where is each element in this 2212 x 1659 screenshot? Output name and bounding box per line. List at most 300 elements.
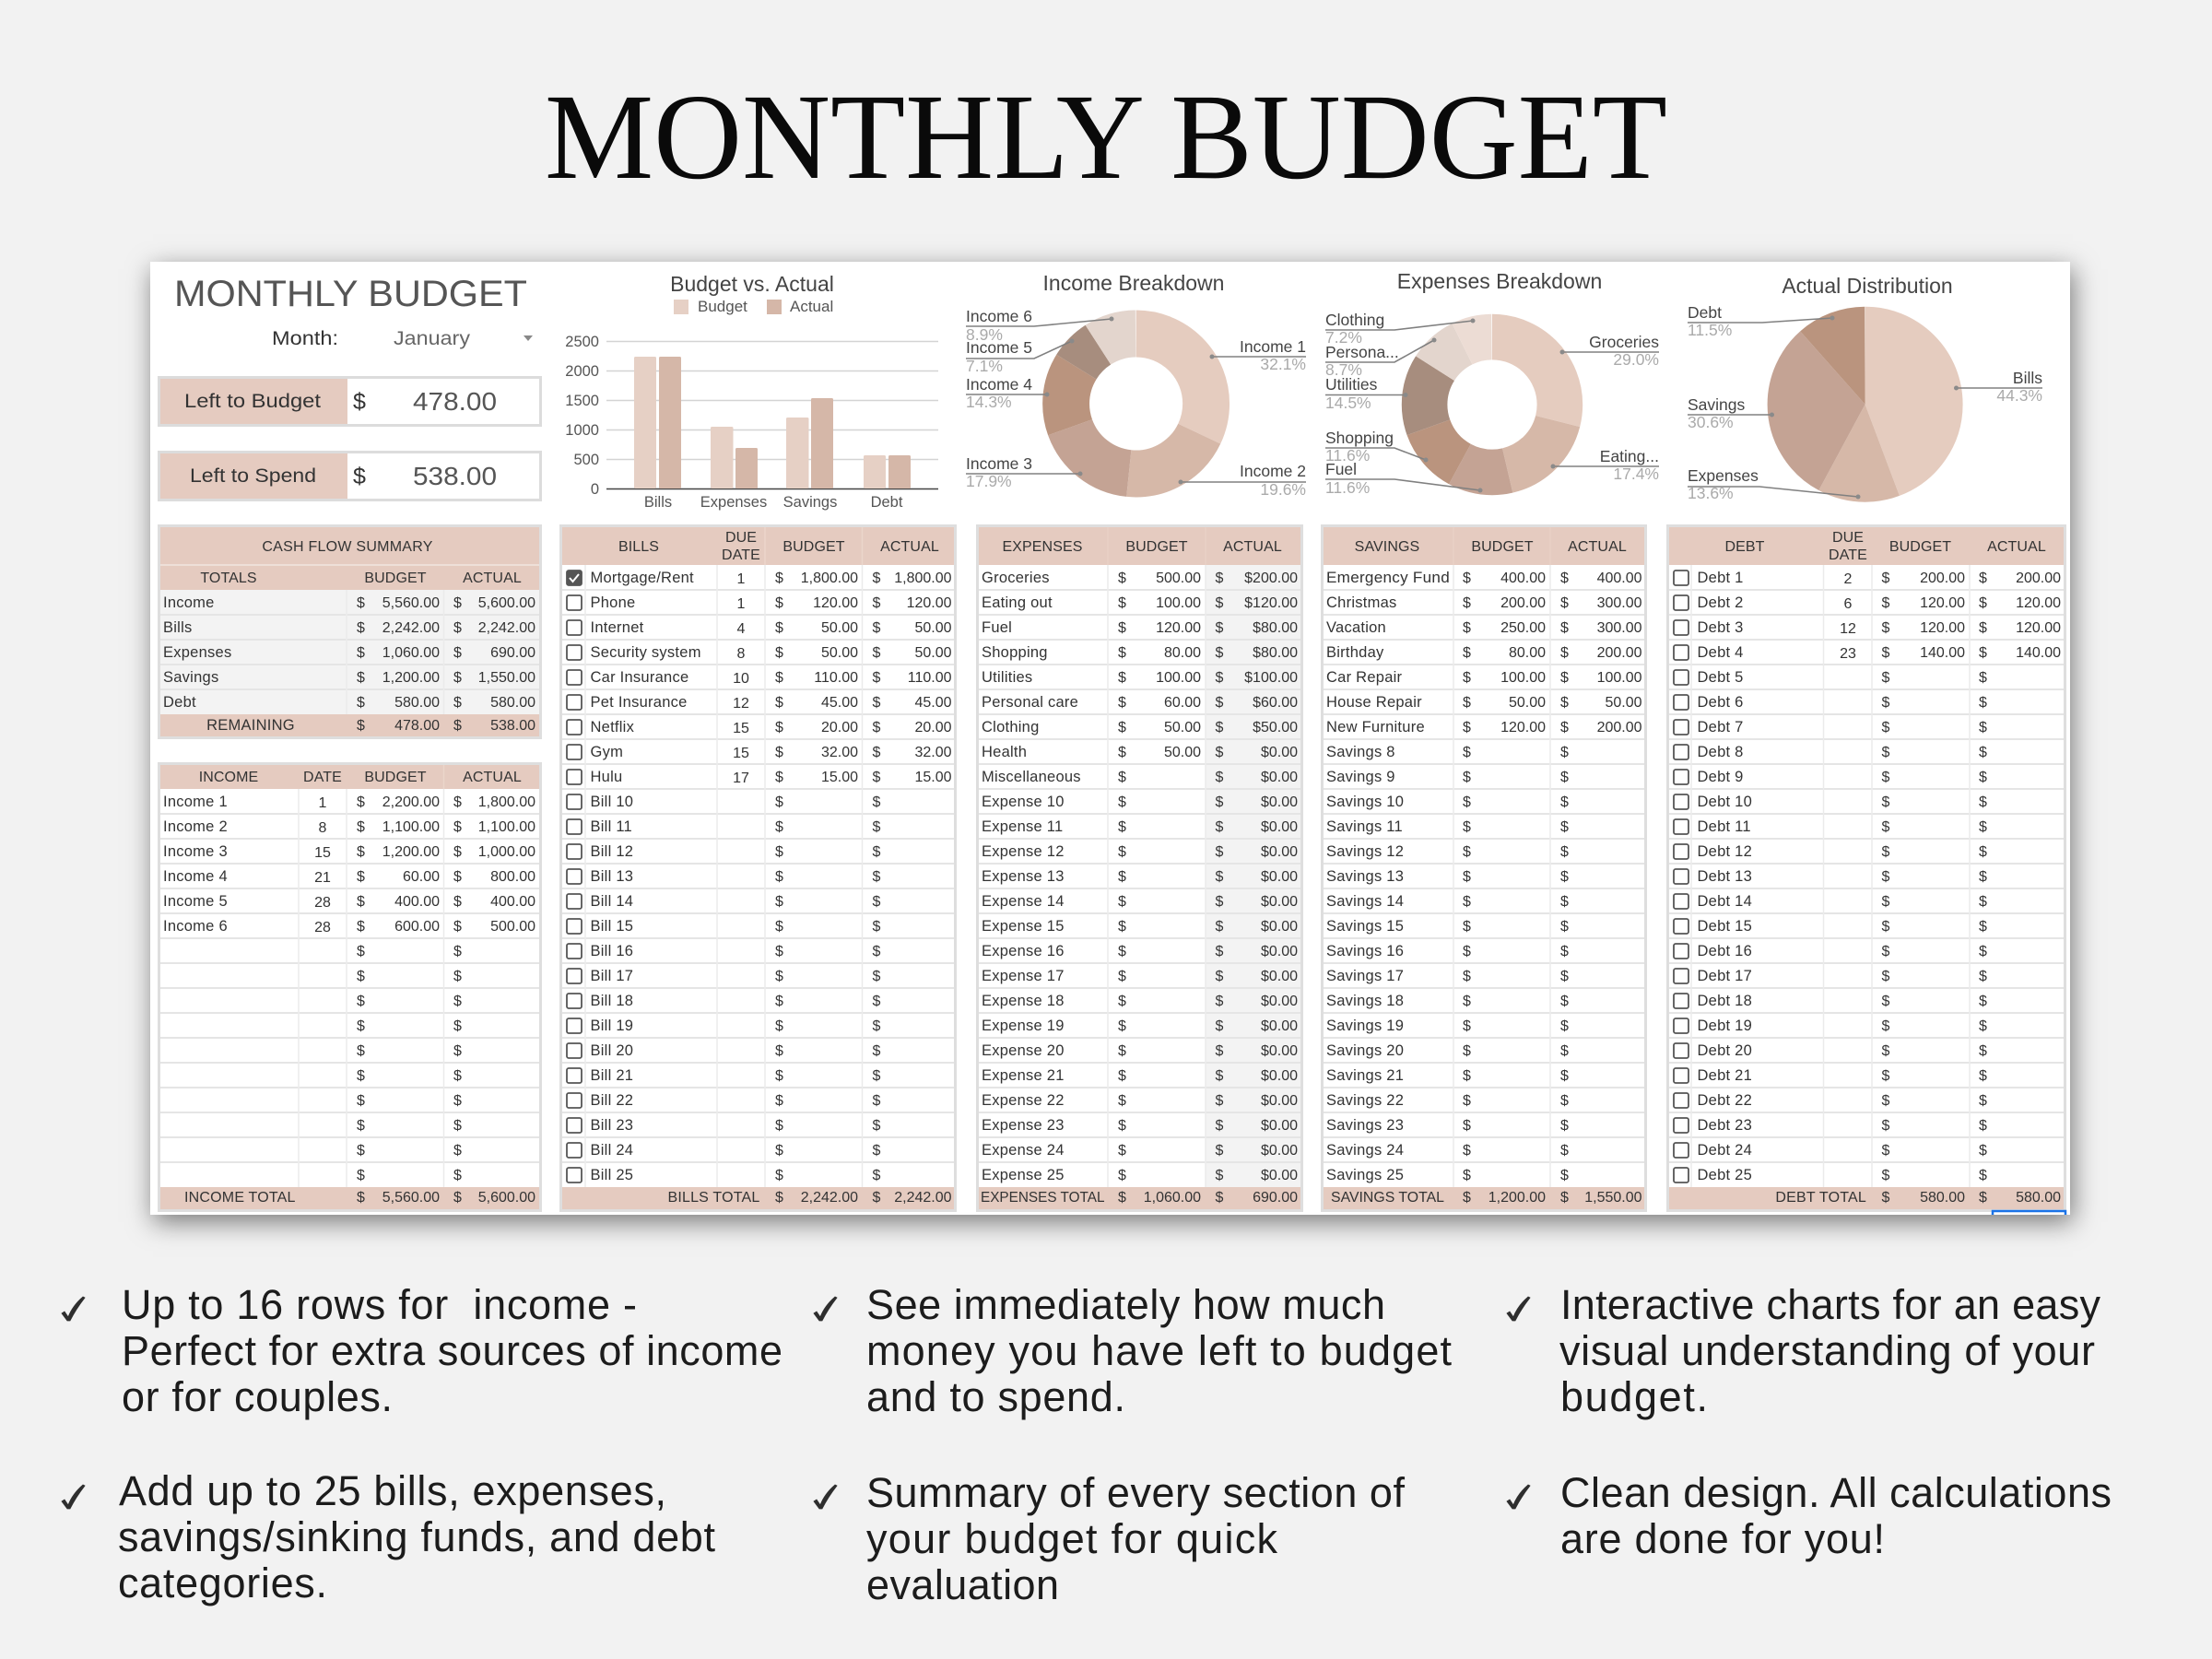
left to spend box (159, 452, 540, 500)
dollar signs: $ (1979, 1143, 1987, 1159)
budget values (382, 595, 440, 734)
dollar signs: $ (872, 869, 881, 885)
feature: income rows: Up to 16 rows for income - (122, 1281, 637, 1328)
savings names: Christmas (1326, 594, 1397, 611)
actual values: 1,800.00 (894, 571, 952, 586)
dollar signs: $ (1560, 919, 1569, 935)
savings names: Savings 9 (1326, 769, 1395, 785)
dollar signs: $ (1882, 894, 1889, 910)
budget values (382, 794, 440, 935)
dollar signs: $ (1215, 844, 1224, 860)
slice labels: 7.2% (1325, 328, 1362, 347)
budget values: 80.00 (1509, 645, 1546, 661)
header: BUDGET (1471, 539, 1534, 555)
dollar signs: $ (1979, 620, 1987, 636)
debt names: Debt 19 (1698, 1018, 1752, 1034)
bill names: Internet (590, 619, 644, 636)
dollar signs: $ (1882, 720, 1889, 735)
dollar signs: $ (775, 1118, 783, 1134)
dollar signs: $ (1118, 969, 1126, 984)
bills total row: 2,242.00 (894, 1190, 952, 1206)
dollar signs: $ (357, 1118, 365, 1134)
header: ACTUAL (880, 539, 939, 555)
dates: 28 (314, 895, 331, 911)
debt names: Debt 13 (1698, 868, 1752, 885)
due dates: 1 (737, 596, 746, 612)
dollar signs: $ (453, 819, 462, 835)
dollar signs: $ (775, 670, 783, 686)
header: DUE (1832, 530, 1864, 546)
dollar signs: $ (357, 620, 365, 636)
actual values: 5,600.00 (478, 595, 535, 611)
income total row: $ (357, 1190, 365, 1206)
slice labels: 13.6% (1688, 484, 1734, 502)
actual values: $0.00 (1261, 1143, 1298, 1159)
actual values: 1,000.00 (478, 844, 535, 860)
header: CASH FLOW SUMMARY (262, 539, 433, 555)
bill names: Phone (590, 594, 635, 611)
dollar signs: $ (1118, 894, 1126, 910)
bill names: Bill 17 (590, 968, 633, 984)
dollar signs: $ (872, 994, 881, 1009)
budget values (1500, 571, 1546, 735)
actual values: $0.00 (1261, 894, 1298, 910)
actual values: 300.00 (1597, 595, 1642, 611)
slice labels (966, 307, 1306, 499)
donut slices (1425, 337, 1559, 472)
dollar signs: $ (1118, 1118, 1126, 1134)
dollar signs: $ (1118, 1043, 1126, 1059)
slice labels (1688, 303, 2042, 502)
row names (163, 594, 295, 734)
dollar signs: $ (1463, 571, 1471, 586)
debt names: Debt 24 (1698, 1142, 1752, 1159)
slice labels: 30.6% (1688, 413, 1734, 431)
slice labels: 17.4% (1613, 465, 1659, 483)
budget values: 100.00 (1156, 670, 1201, 686)
income names (163, 794, 228, 935)
dollar signs (1882, 571, 1987, 1183)
dollar signs: $ (1979, 571, 1987, 586)
expense names: Expense 13 (982, 868, 1065, 885)
actual values (478, 794, 535, 935)
dollar signs: $ (357, 994, 365, 1009)
due dates: 8 (737, 646, 746, 662)
due dates: 15 (733, 721, 749, 736)
debt names: Debt 1 (1698, 570, 1744, 586)
dollar signs: $ (357, 670, 365, 686)
bills total row: $ (775, 1190, 783, 1206)
dollar signs: $ (775, 1168, 783, 1183)
expense names: Miscellaneous (982, 769, 1081, 785)
dollar signs: $ (1979, 720, 1987, 735)
dollar signs: $ (775, 819, 783, 835)
dollar signs: $ (872, 794, 881, 810)
dollar signs: $ (357, 819, 365, 835)
dollar signs: $ (357, 1018, 365, 1034)
debt names: Debt 11 (1698, 818, 1751, 835)
dollar signs: $ (775, 720, 783, 735)
dollar signs: $ (1979, 819, 1987, 835)
dollar signs: $ (1882, 944, 1889, 959)
savings names: Savings 22 (1326, 1092, 1404, 1109)
left to budget box: 478.00 (413, 387, 497, 416)
feature: clean design: are done for you! (1560, 1515, 1885, 1562)
dollar signs: $ (1118, 794, 1126, 810)
dollar signs: $ (1463, 620, 1471, 636)
savings names: New Furniture (1326, 719, 1425, 735)
actual values (2016, 571, 2061, 661)
expense names: Expense 10 (982, 794, 1065, 810)
budget values: 400.00 (394, 894, 440, 910)
header: DUE (725, 530, 757, 546)
left to budget box: $ (353, 389, 366, 415)
table: debt (1668, 525, 2065, 1211)
expenses total row: 1,060.00 (1144, 1190, 1201, 1206)
budget values: 50.00 (1164, 745, 1201, 760)
header (200, 539, 522, 586)
savings names (1326, 570, 1450, 1183)
dollar signs: $ (1215, 645, 1224, 661)
dates (314, 795, 331, 935)
budget values: 478.00 (394, 718, 440, 734)
dollar signs: $ (1560, 695, 1569, 711)
dollar signs: $ (1118, 944, 1126, 959)
icon: check mark (814, 1485, 837, 1509)
dollar signs: $ (1215, 819, 1224, 835)
header: ACTUAL (463, 770, 522, 785)
dollar signs: $ (1882, 620, 1889, 636)
dollar signs: $ (1463, 595, 1471, 611)
y axis and grid lines: 1000 (565, 422, 599, 439)
budget values: 580.00 (394, 695, 440, 711)
savings names: Savings 23 (1326, 1117, 1404, 1134)
savings total row: 1,550.00 (1584, 1190, 1642, 1206)
actual values: 538.00 (490, 718, 535, 734)
dollar signs: $ (1215, 794, 1224, 810)
dollar signs: $ (1118, 819, 1126, 835)
feature: clean design (1507, 1469, 2112, 1562)
budget values: 1,200.00 (382, 670, 440, 686)
header: DEBT (1724, 539, 1765, 555)
dollar signs: $ (1979, 794, 1987, 810)
budget values: 120.00 (813, 595, 858, 611)
dollar signs: $ (872, 1018, 881, 1034)
actual values: 400.00 (490, 894, 535, 910)
feature: categories: Add up to 25 bills, expenses, (119, 1467, 666, 1514)
actual values: $0.00 (1261, 1018, 1298, 1034)
savings names: Birthday (1326, 644, 1384, 661)
dollar signs: $ (1463, 844, 1471, 860)
dollar signs: $ (1118, 869, 1126, 885)
dollar signs: $ (1215, 869, 1224, 885)
dollar signs: $ (453, 620, 462, 636)
debt names: Debt 2 (1698, 594, 1744, 611)
header: BUDGET (364, 571, 427, 586)
expense names: Expense 11 (982, 818, 1063, 835)
dollar signs: $ (453, 894, 462, 910)
dollar signs: $ (775, 695, 783, 711)
due dates: 1 (737, 571, 746, 587)
actual values: 15.00 (914, 770, 952, 785)
budget values: 1,200.00 (382, 844, 440, 860)
dollar signs: $ (1215, 1093, 1224, 1109)
slice labels: 7.1% (966, 357, 1003, 375)
income names: Income 1 (163, 794, 228, 810)
due dates: 15 (733, 746, 749, 761)
dollar signs: $ (1882, 919, 1889, 935)
actual values: 45.00 (914, 695, 952, 711)
bill names: Bill 12 (590, 843, 633, 860)
dollar signs: $ (1118, 720, 1126, 735)
dollar signs: $ (775, 1043, 783, 1059)
slice labels: 11.6% (1325, 446, 1370, 465)
income names: Income 6 (163, 918, 228, 935)
slice labels: 32.1% (1260, 355, 1306, 373)
actual values: $0.00 (1261, 919, 1298, 935)
dollar signs: $ (1463, 745, 1471, 760)
actual values: 32.00 (914, 745, 952, 760)
header: TOTALS (200, 571, 257, 586)
row names: REMAINING (206, 717, 295, 734)
slice labels: Clothing (1325, 311, 1384, 329)
expense names: Expense 14 (982, 893, 1065, 910)
actual values: 200.00 (1597, 720, 1642, 735)
bill names: Bill 16 (590, 943, 633, 959)
dollar signs: $ (872, 645, 881, 661)
debt names: Debt 17 (1698, 968, 1752, 984)
actual values: $0.00 (1261, 1168, 1298, 1183)
chart title: Actual Distribution (1782, 274, 1953, 298)
slice labels: 8.9% (966, 325, 1003, 344)
bars: actual (659, 357, 911, 488)
icon: check mark (1507, 1485, 1530, 1509)
x axis labels (644, 494, 903, 511)
table: cash flow summary (159, 525, 540, 737)
y axis and grid lines: 1500 (565, 393, 599, 409)
savings total row: 1,200.00 (1488, 1190, 1546, 1206)
dollar signs: $ (453, 1168, 462, 1183)
bill names: Gym (590, 744, 623, 760)
slice labels: Income 5 (966, 338, 1032, 357)
actual values: $0.00 (1261, 844, 1298, 860)
bill names: Bill 19 (590, 1018, 633, 1034)
left to spend box: 538.00 (413, 462, 497, 490)
checkboxes (1674, 571, 1688, 1182)
budget values: 50.00 (1509, 695, 1546, 711)
dollar signs: $ (1979, 894, 1987, 910)
bill names: Bill 23 (590, 1117, 633, 1134)
dollar signs: $ (453, 595, 462, 611)
bill names: Bill 14 (590, 893, 633, 910)
dollar signs: $ (1463, 794, 1471, 810)
dollar signs: $ (1979, 1043, 1987, 1059)
bill names: Bill 15 (590, 918, 633, 935)
dollar signs: $ (357, 595, 365, 611)
dollar signs: $ (872, 745, 881, 760)
savings total row (1331, 1190, 1642, 1206)
budget values: 80.00 (1164, 645, 1201, 661)
chart legend: Actual (790, 298, 833, 315)
dollar signs: $ (1215, 894, 1224, 910)
dollar signs: $ (453, 1118, 462, 1134)
budget values: 15.00 (821, 770, 858, 785)
slice labels: Utilities (1325, 375, 1378, 394)
leader lines (966, 317, 1306, 485)
dollar signs: $ (1882, 1043, 1889, 1059)
dollar signs: $ (453, 944, 462, 959)
slice labels: Fuel (1325, 460, 1357, 478)
dollar signs: $ (1560, 1018, 1569, 1034)
table: savings (1322, 525, 1646, 1211)
bill names: Bill 10 (590, 794, 633, 810)
dollar signs: $ (1463, 1143, 1471, 1159)
dollar signs: $ (1979, 1118, 1987, 1134)
debt names: Debt 9 (1698, 769, 1744, 785)
feature: interactive charts: visual understanding of your (1559, 1327, 2095, 1374)
due dates: 12 (733, 696, 749, 712)
dollar signs: $ (1463, 919, 1471, 935)
savings total row: $ (1560, 1190, 1569, 1206)
feature: income rows: or for couples. (122, 1373, 393, 1420)
dollar signs: $ (872, 595, 881, 611)
expense names: Groceries (982, 570, 1050, 586)
dollar signs: $ (453, 1068, 462, 1084)
savings names: Savings 16 (1326, 943, 1404, 959)
dollar signs: $ (775, 869, 783, 885)
dollar signs: $ (872, 1043, 881, 1059)
dollar signs: $ (1979, 994, 1987, 1009)
actual values: 400.00 (1597, 571, 1642, 586)
slice labels: 19.6% (1260, 480, 1306, 499)
dollar signs: $ (1560, 1093, 1569, 1109)
selected cell outline (1993, 1211, 2065, 1215)
dollar signs: $ (872, 919, 881, 935)
bill names: Bill 13 (590, 868, 633, 885)
actual values: 1,550.00 (478, 670, 535, 686)
dollar signs: $ (775, 919, 783, 935)
dollar signs: $ (775, 794, 783, 810)
y axis and grid lines (565, 334, 938, 498)
dollar signs: $ (1463, 944, 1471, 959)
dollar signs: $ (872, 1093, 881, 1109)
checkboxes (567, 571, 582, 1182)
spreadsheet panel background (150, 262, 2070, 1215)
income total row: INCOME TOTAL (184, 1190, 296, 1206)
dollar signs: $ (1979, 595, 1987, 611)
actual values: 120.00 (2016, 595, 2061, 611)
actual values: $120.00 (1244, 595, 1298, 611)
expense names: Expense 21 (982, 1067, 1065, 1084)
dollar signs: $ (1463, 819, 1471, 835)
dollar signs (1118, 571, 1224, 1183)
dollar signs: $ (1118, 1093, 1126, 1109)
debt names: Debt 12 (1698, 843, 1752, 860)
dollar signs: $ (775, 770, 783, 785)
bill names: Netflix (590, 719, 635, 735)
bill names: Mortgage/Rent (590, 570, 694, 586)
header: EXPENSES (1002, 539, 1083, 555)
feature: summary: Summary of every section of (866, 1469, 1405, 1516)
income names: Income 4 (163, 868, 228, 885)
slice labels: 11.5% (1688, 321, 1732, 339)
bar chart: budget vs actual (565, 272, 938, 511)
actual values: 50.00 (1605, 695, 1642, 711)
header: ACTUAL (1568, 539, 1627, 555)
bill names: Hulu (590, 769, 622, 785)
savings names: Car Repair (1326, 669, 1403, 686)
budget values: 1,060.00 (382, 645, 440, 661)
budget values: 500.00 (1156, 571, 1201, 586)
dollar signs: $ (872, 695, 881, 711)
bill names (590, 570, 701, 1183)
dollar signs: $ (1463, 1018, 1471, 1034)
dollar signs: $ (1560, 994, 1569, 1009)
row names: Savings (163, 669, 218, 686)
dollar signs: $ (1463, 1093, 1471, 1109)
budget values (1156, 571, 1201, 760)
sheet heading: MONTHLY BUDGET (174, 274, 527, 314)
slice labels: 29.0% (1613, 350, 1659, 369)
pie slices (1817, 356, 1914, 453)
savings names: House Repair (1326, 694, 1422, 711)
dollar signs: $ (357, 1168, 365, 1183)
dollar signs: $ (775, 1143, 783, 1159)
feature: interactive charts: budget. (1560, 1373, 1708, 1420)
dollar signs: $ (1882, 670, 1889, 686)
header: BUDGET (782, 539, 845, 555)
feature list column 3 (1507, 1281, 2112, 1562)
dollar signs: $ (1560, 670, 1569, 686)
dollar signs: $ (1463, 695, 1471, 711)
bill names: Security system (590, 644, 701, 661)
header (1355, 539, 1627, 555)
budget values: 1,100.00 (382, 819, 440, 835)
savings names: Savings 15 (1326, 918, 1404, 935)
actual values: $0.00 (1261, 869, 1298, 885)
dollar signs: $ (872, 819, 881, 835)
budget values: 50.00 (821, 645, 858, 661)
dollar signs: $ (872, 844, 881, 860)
actual values: 20.00 (914, 720, 952, 735)
y axis and grid lines: 2000 (565, 363, 599, 380)
dollar signs: $ (1215, 670, 1224, 686)
budget values: 120.00 (1920, 620, 1965, 636)
due dates: 2 (1844, 571, 1853, 587)
dollar signs: $ (1463, 1043, 1471, 1059)
dollar signs: $ (1215, 745, 1224, 760)
dollar signs: $ (1215, 1168, 1224, 1183)
dollar signs: $ (453, 1018, 462, 1034)
dollar signs: $ (872, 571, 881, 586)
dollar signs: $ (357, 1068, 365, 1084)
budget values: 140.00 (1920, 645, 1965, 661)
expense names: Expense 16 (982, 943, 1065, 959)
dollar signs: $ (453, 844, 462, 860)
budget values (1920, 571, 1965, 661)
debt names: Debt 22 (1698, 1092, 1752, 1109)
dollar signs: $ (1882, 595, 1889, 611)
slice labels: 8.7% (1325, 360, 1362, 379)
header (1002, 539, 1282, 555)
dollar signs: $ (1215, 595, 1224, 611)
savings names: Savings 17 (1326, 968, 1404, 984)
left to spend box: Left to Spend (190, 465, 316, 487)
icon: check mark (814, 1297, 837, 1321)
dollar signs: $ (872, 1168, 881, 1183)
dollar signs: $ (357, 869, 365, 885)
expenses total row: EXPENSES TOTAL (981, 1190, 1105, 1206)
